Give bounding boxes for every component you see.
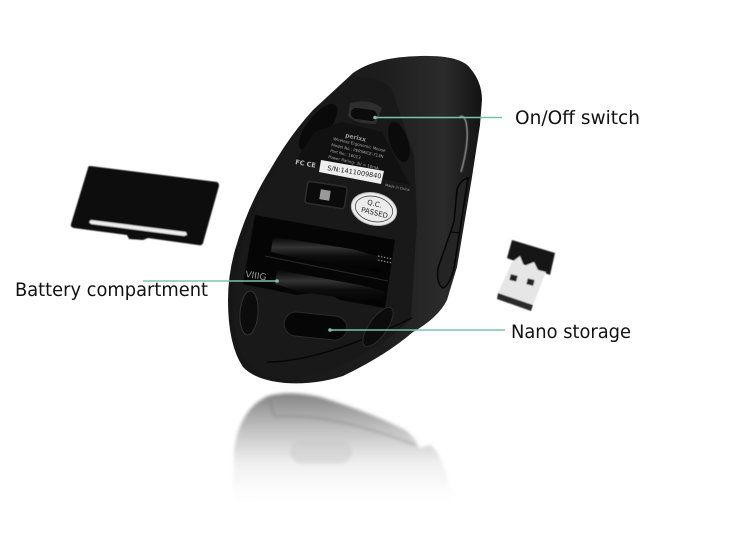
serial number sticker: S/N:1411009840 (327, 164, 382, 181)
label: on/off switch: On/Off switch (515, 107, 640, 129)
pointer line: nano storage (328, 328, 505, 332)
product label: FC CE (295, 158, 316, 170)
serial number sticker (319, 160, 384, 184)
feet pads (292, 98, 344, 156)
product label: Part No.: 16013 (330, 148, 362, 160)
product label: perixx (345, 132, 367, 144)
product label: Wireless Ergonomic Mouse (333, 136, 387, 153)
label: battery compartment: Battery compartment (15, 279, 208, 301)
QC passed sticker: Q.C. (366, 198, 383, 210)
made in china mark: Made in China (385, 183, 410, 192)
label: nano storage: Nano storage (511, 321, 631, 343)
nano storage slot (283, 311, 348, 341)
product label: Power Rating: 3V = 10mA (328, 154, 380, 171)
side highlight (459, 116, 467, 172)
battery compartment: VIIIG (245, 270, 267, 283)
product label (295, 122, 410, 185)
QC passed sticker (348, 188, 400, 230)
usb nano receiver (497, 240, 555, 311)
QC passed sticker: PASSED (360, 206, 389, 220)
pointer line: battery compartment (143, 279, 279, 283)
battery compartment (243, 215, 395, 308)
on/off switch (348, 101, 382, 124)
side buttons (438, 178, 468, 288)
product label: Model No.: PERIMICE-713N (331, 142, 384, 159)
mouse body (228, 56, 482, 383)
mouse reflection (233, 393, 458, 510)
pointer line: on/off switch (373, 116, 502, 119)
dpi slider (305, 181, 347, 209)
base plate (232, 76, 417, 376)
battery cover (71, 166, 219, 245)
